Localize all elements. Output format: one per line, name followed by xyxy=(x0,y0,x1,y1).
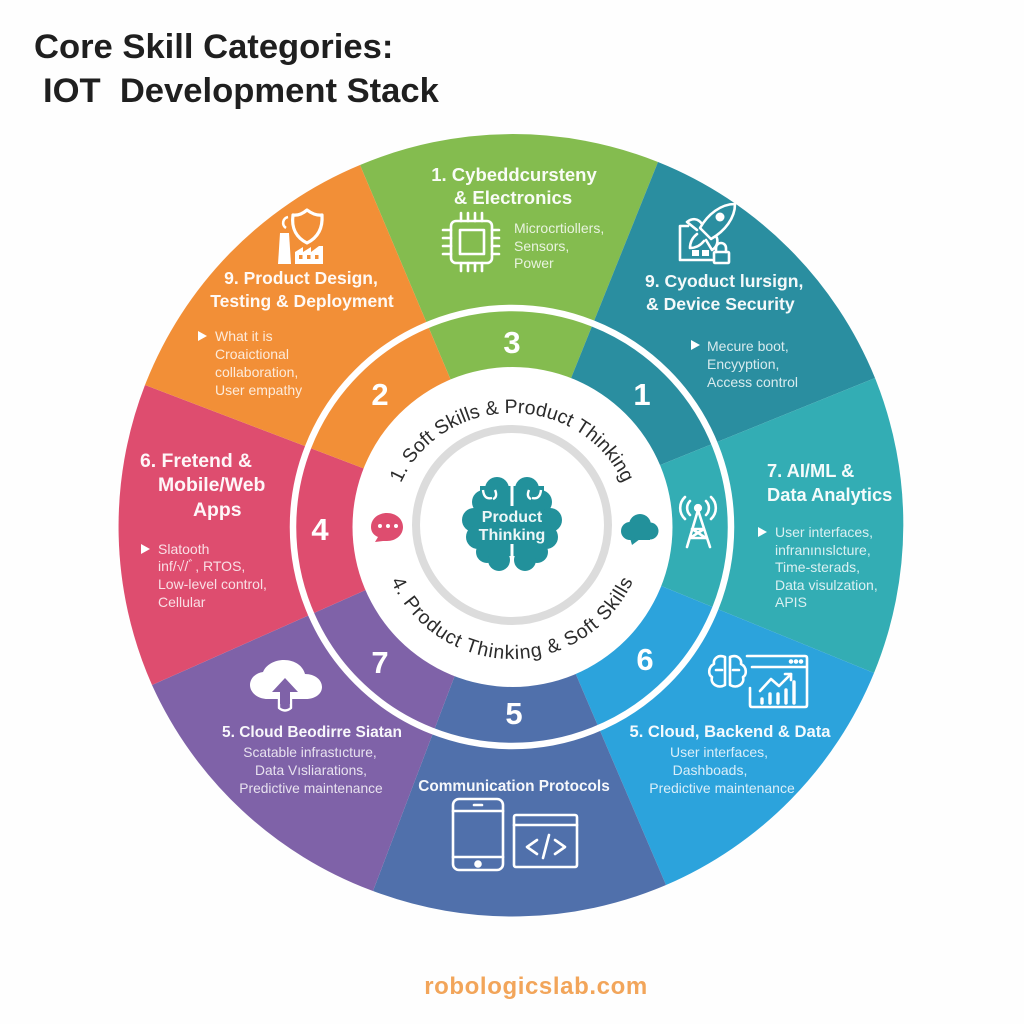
body text: APIS xyxy=(775,594,807,610)
body text: User empathy xyxy=(215,382,302,398)
panel: green wedge content xyxy=(431,164,604,271)
panel: pink wedge content xyxy=(140,450,267,610)
icon: cloud upload xyxy=(250,660,322,710)
body text: inf/√/ﾞ, RTOS, xyxy=(158,558,245,574)
wedge: pink xyxy=(119,385,512,685)
icon: pink speech bubble xyxy=(371,513,403,542)
icon: brain and analytics window xyxy=(709,656,807,707)
icon: brain with label: Product xyxy=(482,509,543,526)
bullet xyxy=(141,544,150,554)
icon: shield and factory xyxy=(278,210,323,264)
grey inner ring xyxy=(416,429,608,621)
wedge: orange xyxy=(145,165,512,525)
icon: code window xyxy=(514,815,577,867)
ring numbers: 2 xyxy=(371,377,389,412)
inner white disc xyxy=(352,367,672,687)
bullet xyxy=(198,331,207,341)
panel: sky blue wedge content xyxy=(629,656,831,796)
body text: User interfaces, xyxy=(775,524,873,540)
body text: Cellular xyxy=(158,594,206,610)
body text: Dashboads, xyxy=(673,762,747,778)
white ring xyxy=(293,308,731,746)
body text xyxy=(158,541,267,610)
heading: 1. Cybeddcursteny xyxy=(431,164,597,185)
wedge: dark teal xyxy=(512,162,875,525)
bullet xyxy=(758,527,767,537)
panel: blue wedge content xyxy=(418,778,610,870)
icon: chip xyxy=(443,213,499,271)
icon: brain with label xyxy=(462,477,562,572)
body text: What it is xyxy=(215,328,273,344)
body text: Low-level control, xyxy=(158,576,267,592)
heading xyxy=(431,164,597,208)
heading: & Electronics xyxy=(454,187,572,208)
curved text: bottom: 4. Product Thinking & Soft Skills xyxy=(394,578,632,661)
heading xyxy=(140,450,266,521)
body text: Slatooth xyxy=(158,541,209,557)
body text xyxy=(215,328,302,398)
body text: Predictive maintenance xyxy=(649,780,795,796)
heading xyxy=(210,268,394,311)
body text xyxy=(707,338,798,390)
icon: teal cloud bubble xyxy=(621,514,658,545)
title: Core Skill Categories: xyxy=(34,28,393,66)
body text xyxy=(514,220,604,271)
body text xyxy=(239,745,383,796)
footer url: robologicslab.com xyxy=(424,973,648,1000)
body text: Predictive maintenance xyxy=(239,781,383,796)
panel: dark teal wedge content xyxy=(645,204,803,390)
heading: 5. Cloud, Backend & Data xyxy=(629,722,831,741)
heading: 6. Fretend & xyxy=(140,450,252,472)
wheel of wedges xyxy=(119,134,903,916)
heading: Mobile/Web xyxy=(158,474,266,496)
body text: User interfaces, xyxy=(670,744,768,760)
heading: Apps xyxy=(193,499,241,521)
title: IOT Development Stack xyxy=(43,72,440,110)
heading xyxy=(767,460,892,505)
body text: Microcrtiollers, xyxy=(514,220,604,236)
heading: & Device Security xyxy=(646,294,795,314)
ring numbers: 6 xyxy=(636,642,654,677)
panel: light teal wedge content xyxy=(680,460,892,610)
wedge: blue xyxy=(373,525,666,916)
heading xyxy=(645,271,803,314)
heading: Communication Protocols xyxy=(418,778,610,795)
body text: Sensors, xyxy=(514,238,569,254)
ring numbers: 1 xyxy=(633,377,651,412)
title xyxy=(34,28,440,110)
icon: smartphone xyxy=(453,799,503,870)
ring numbers xyxy=(311,325,654,731)
heading: 9. Product Design, xyxy=(224,268,378,288)
icon: brain with label: Thinking xyxy=(479,527,545,544)
heading: 5. Cloud Beodirre Siatan xyxy=(222,724,402,741)
heading: Testing & Deployment xyxy=(210,291,394,311)
ring numbers: 5 xyxy=(505,696,523,731)
body text: collaboration, xyxy=(215,364,298,380)
body text: Encyyption, xyxy=(707,356,779,372)
icon: rocket and lock xyxy=(680,204,735,263)
panel: purple wedge content xyxy=(222,660,402,796)
wedge: light teal xyxy=(512,378,903,673)
ring numbers: 3 xyxy=(503,325,521,360)
body text: Scatable infrastıcture, xyxy=(243,745,377,760)
heading: 7. AI/ML & xyxy=(767,460,854,481)
curved text: top: 1. Soft Skills & Product Thinking xyxy=(391,400,632,482)
wedge: purple xyxy=(152,525,512,891)
body text: Croaictional xyxy=(215,346,289,362)
body text: Time-sterads, xyxy=(775,559,860,575)
ring numbers: 7 xyxy=(371,645,389,680)
panel: orange wedge content xyxy=(198,210,394,398)
body text: Data visulzation, xyxy=(775,577,878,593)
body text xyxy=(775,524,878,610)
bullet xyxy=(691,340,700,350)
body text: Mecure boot, xyxy=(707,338,789,354)
wedge: sky blue xyxy=(512,525,874,885)
body text: Data Vısliarations, xyxy=(255,763,367,778)
body text: Access control xyxy=(707,374,798,390)
ring numbers: 4 xyxy=(311,512,329,547)
wedge: green xyxy=(360,134,658,525)
body text: infranınıslcture, xyxy=(775,542,871,558)
icon: antenna tower xyxy=(680,497,716,547)
heading: Data Analytics xyxy=(767,484,892,505)
heading: 9. Cyoduct lursign, xyxy=(645,271,803,291)
body text xyxy=(649,744,795,796)
body text: Power xyxy=(514,255,554,271)
